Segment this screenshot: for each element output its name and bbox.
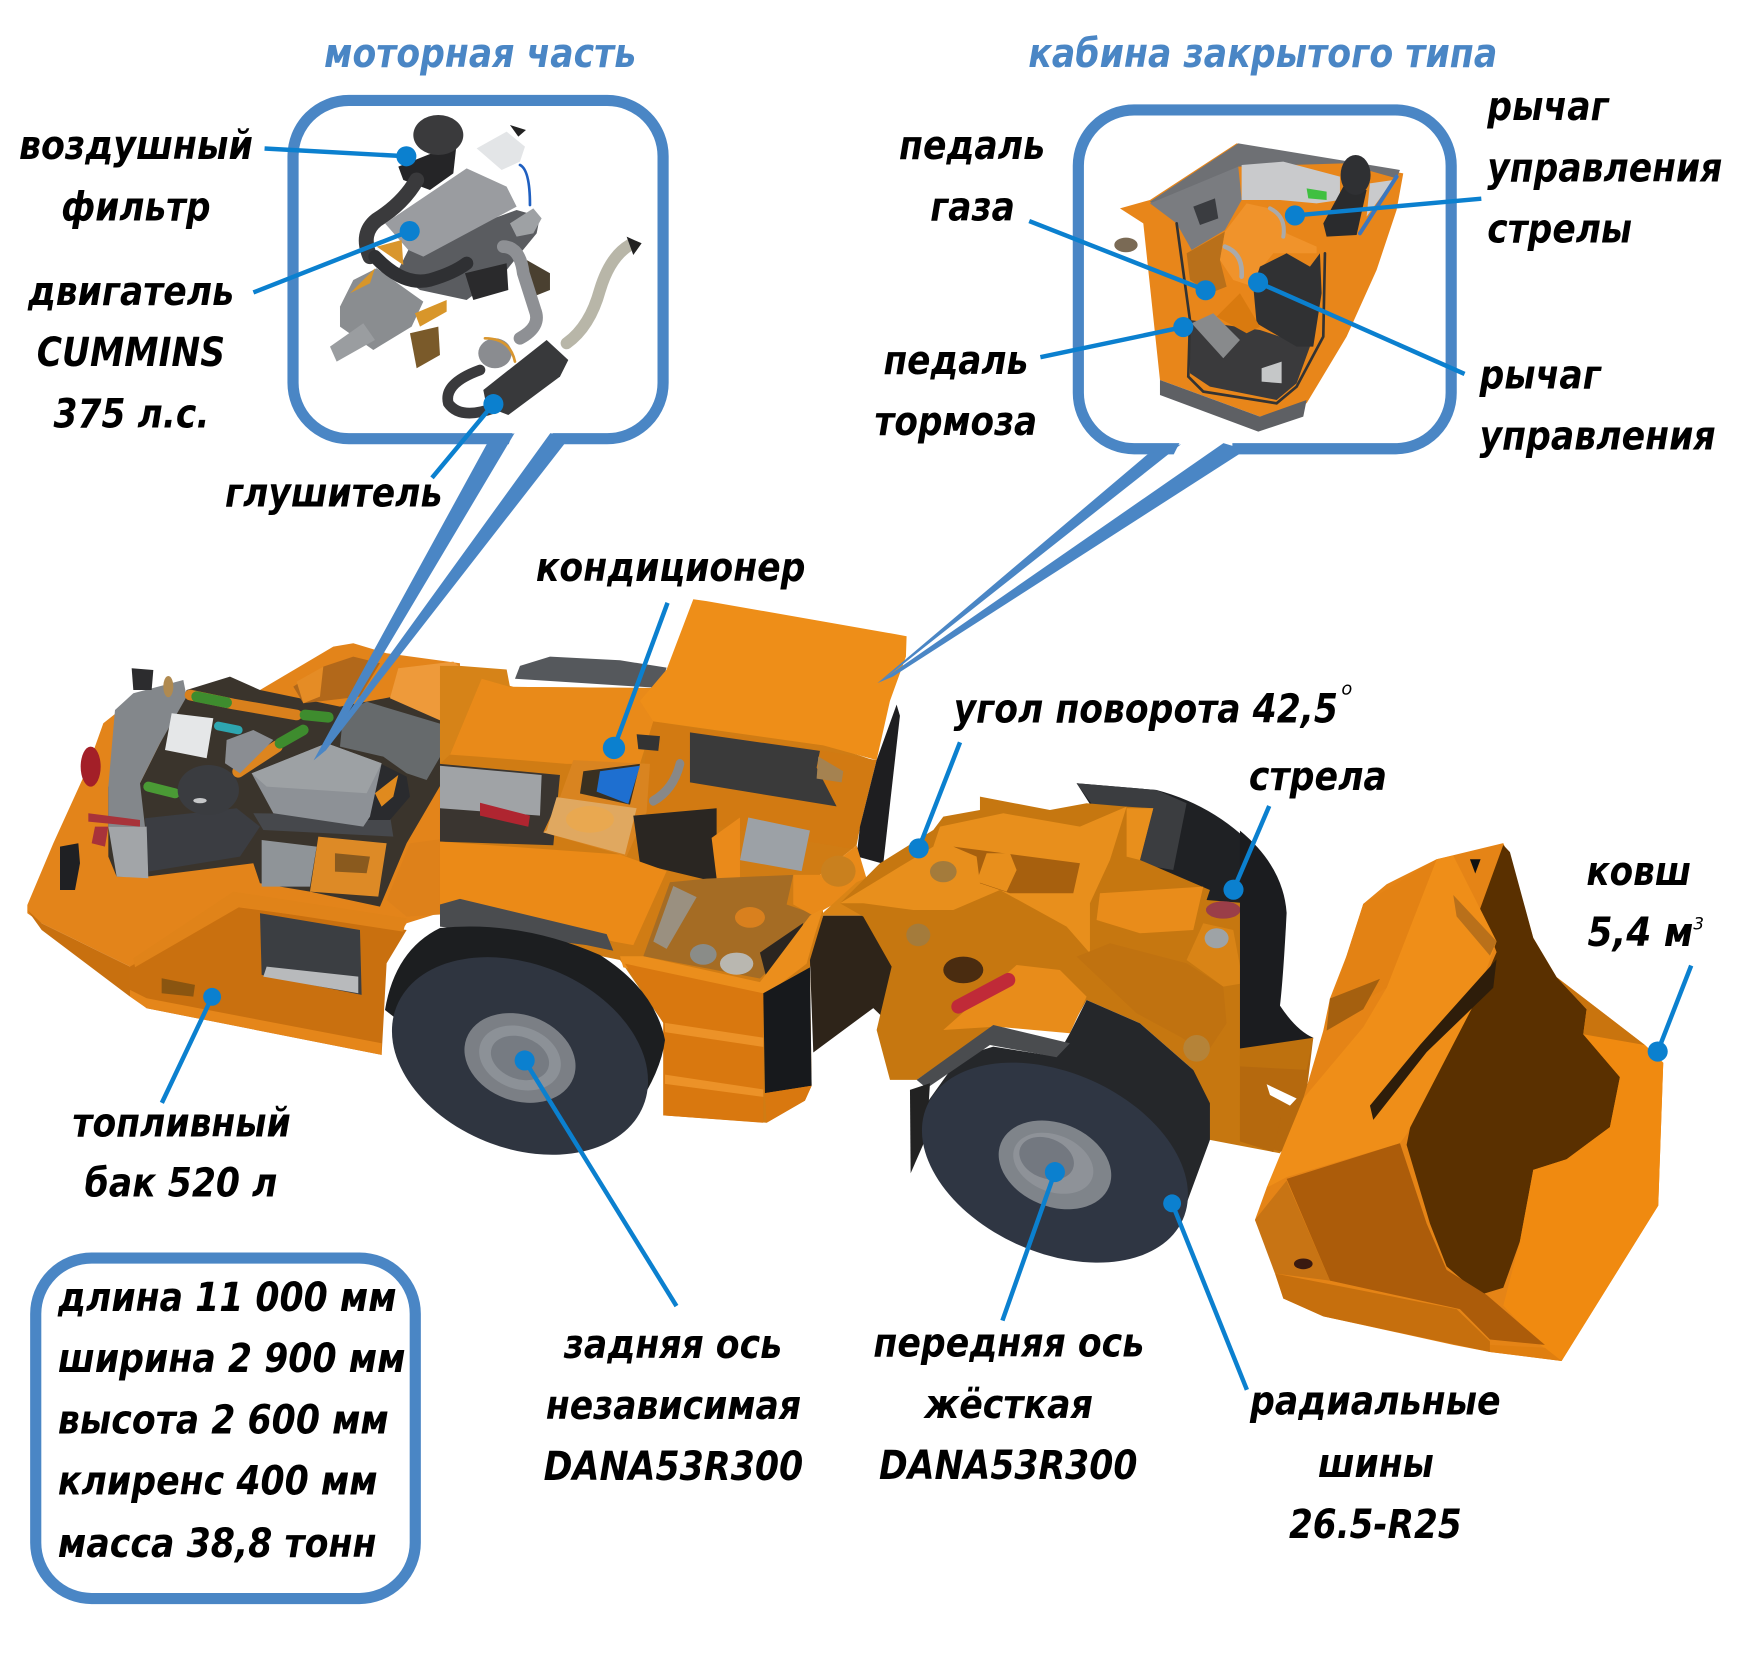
label: radial tyres: радиальные [1249, 1379, 1501, 1425]
label: air conditioner: кондиционер [536, 545, 805, 591]
rear section with engine bay [27, 643, 460, 1055]
cab rear post [857, 705, 900, 864]
leader: gas pedal [1029, 221, 1216, 300]
middle section base [440, 666, 873, 1123]
far front tyre [1077, 783, 1286, 1037]
label: turning angle: угол поворота 42,5 [954, 686, 1338, 732]
callout: cabin section [877, 110, 1451, 683]
air conditioner housing [543, 760, 650, 856]
leader: boom [1223, 806, 1269, 900]
heading: engine section: моторная часть [324, 31, 636, 77]
leader: turning angle [909, 742, 960, 858]
label: boom lever: стрелы [1487, 207, 1632, 253]
label: turning angle: o [1341, 678, 1352, 699]
fuel tank side panel [130, 907, 407, 1055]
engine block [252, 702, 450, 837]
leader: fuel tank [162, 988, 221, 1103]
front arch strip [917, 1025, 1070, 1088]
leader: bucket [1648, 966, 1691, 1062]
right pillar panel [625, 964, 763, 1123]
boom arm [1097, 887, 1203, 933]
panel: dimensions and mass: ширина 2 900 мм [58, 1336, 406, 1382]
frame and clamps [108, 680, 187, 827]
canopy [640, 599, 907, 760]
dark rear of joint [810, 916, 900, 1052]
label: air filter: воздушный [19, 123, 253, 169]
label: fuel tank [72, 1100, 291, 1206]
engine callout pointer [314, 433, 569, 760]
orange tabs [390, 662, 460, 723]
engine bay background [108, 677, 460, 907]
coupling block [310, 837, 387, 897]
label: bucket: 3 [1693, 913, 1704, 933]
leader: air conditioner [603, 603, 668, 759]
cabin callout pointer [877, 443, 1246, 683]
label: rear axle: независимая [546, 1383, 801, 1429]
air filter [145, 765, 260, 872]
pins [906, 861, 1210, 1062]
label: rear axle [544, 1322, 803, 1490]
label: brake pedal: педаль [883, 338, 1028, 384]
label: engine: двигатель [27, 269, 234, 315]
bucket silhouette [1255, 843, 1663, 1361]
boom joint [1206, 901, 1241, 919]
panel: dimensions and mass: масса 38,8 тонн [58, 1521, 377, 1567]
label: boom: стрела [1249, 754, 1387, 800]
bucket [1255, 843, 1663, 1361]
panel: dimensions and mass [36, 1258, 415, 1599]
panel: dimensions and mass: клиренс 400 мм [58, 1459, 378, 1505]
leader: control lever [1248, 272, 1465, 374]
interior right plate [1503, 1034, 1663, 1361]
mudguard [910, 1083, 930, 1173]
bucket front face [1267, 856, 1497, 1188]
leader: front axle [1002, 1162, 1065, 1321]
label: brake pedal [875, 338, 1037, 445]
label: front axle: передняя ось [873, 1321, 1144, 1367]
middle section [440, 599, 907, 1123]
label: bucket: ковш [1586, 849, 1691, 895]
label: front axle [873, 1321, 1144, 1489]
front wheel tread [927, 1000, 1210, 1237]
leader: boom lever [1285, 199, 1481, 225]
callout: engine section [293, 100, 663, 760]
pipes bay [633, 808, 717, 882]
leader: muffler [432, 394, 503, 478]
engine callout frame [293, 100, 663, 439]
label: air filter [19, 123, 253, 230]
label: gas pedal: педаль [899, 123, 1045, 169]
frame top beams [840, 807, 1127, 953]
label: radial tyres: 26.5-R25 [1289, 1502, 1462, 1548]
front frame [840, 797, 1300, 1237]
label: bucket: 5,4 м [1588, 910, 1693, 956]
label: engine: 375 л.с. [53, 391, 209, 437]
frame base [840, 797, 1300, 1153]
bucket interior [1407, 845, 1620, 1295]
tray rim [620, 908, 823, 997]
guard plate [943, 965, 1087, 1033]
hoses [148, 695, 328, 793]
batteries [440, 764, 560, 845]
label: control lever: рычаг [1479, 352, 1603, 398]
red lamp [81, 747, 101, 787]
label: front axle: жёсткая [923, 1382, 1093, 1428]
cab body below canopy [640, 721, 877, 849]
label: boom lever: рычаг [1486, 84, 1610, 130]
leader: radial tyres [1163, 1194, 1247, 1390]
front wheel [890, 1023, 1219, 1302]
hydraulics bay [643, 875, 813, 978]
joint link [820, 864, 900, 916]
heading: cabin section: кабина закрытого типа [1028, 31, 1497, 77]
label: bucket [1586, 849, 1704, 956]
mid deck [440, 842, 667, 945]
label: air filter: фильтр [61, 184, 211, 230]
loader machine illustration [27, 599, 1663, 1361]
rear wheel [362, 921, 678, 1191]
label: rear axle: задняя ось [563, 1322, 782, 1368]
bucket lower lip [1275, 1273, 1490, 1352]
control box [740, 818, 810, 871]
engine picture [330, 115, 642, 415]
label: control lever [1479, 352, 1716, 460]
cabin callout frame [1078, 110, 1451, 449]
leader: engine [253, 221, 420, 292]
label: fuel tank: бак 520 л [85, 1160, 277, 1206]
leader: brake pedal [1040, 317, 1193, 357]
far tyre edge [1240, 831, 1313, 1049]
label: control lever: управления [1479, 414, 1716, 460]
panel: dimensions and mass: высота 2 600 мм [58, 1397, 389, 1443]
label: radial tyres [1249, 1379, 1501, 1548]
label: front axle: DANA53R300 [879, 1443, 1137, 1489]
label: engine: CUMMINS [37, 330, 225, 376]
label: boom lever [1486, 84, 1722, 253]
window opening [260, 913, 362, 995]
rear deck [27, 643, 460, 967]
wheel arch strip [440, 899, 613, 951]
label: rear axle: DANA53R300 [544, 1444, 803, 1490]
leader: rear axle [515, 1050, 676, 1306]
rear lower strip [27, 910, 130, 997]
label: gas pedal [899, 123, 1045, 230]
label: fuel tank: топливный [72, 1100, 291, 1146]
dark strap [1370, 959, 1497, 1120]
arm and bucket connection [1240, 831, 1313, 1152]
label: gas pedal: газа [930, 184, 1015, 230]
panel: dimensions and mass: длина 11 000 мм [57, 1275, 397, 1321]
leader: air filter [265, 146, 416, 166]
label: brake pedal: тормоза [875, 399, 1037, 445]
red cylinder [958, 980, 1008, 1007]
dark pane [763, 967, 812, 1093]
side plate [1287, 1143, 1545, 1345]
hood [450, 678, 660, 764]
articulation mount [793, 845, 867, 916]
label: muffler: глушитель [225, 470, 442, 516]
far rear tyre top [515, 657, 667, 688]
label: engine [27, 269, 234, 437]
label: radial tyres: шины [1318, 1441, 1434, 1487]
cabin picture [1114, 143, 1403, 432]
